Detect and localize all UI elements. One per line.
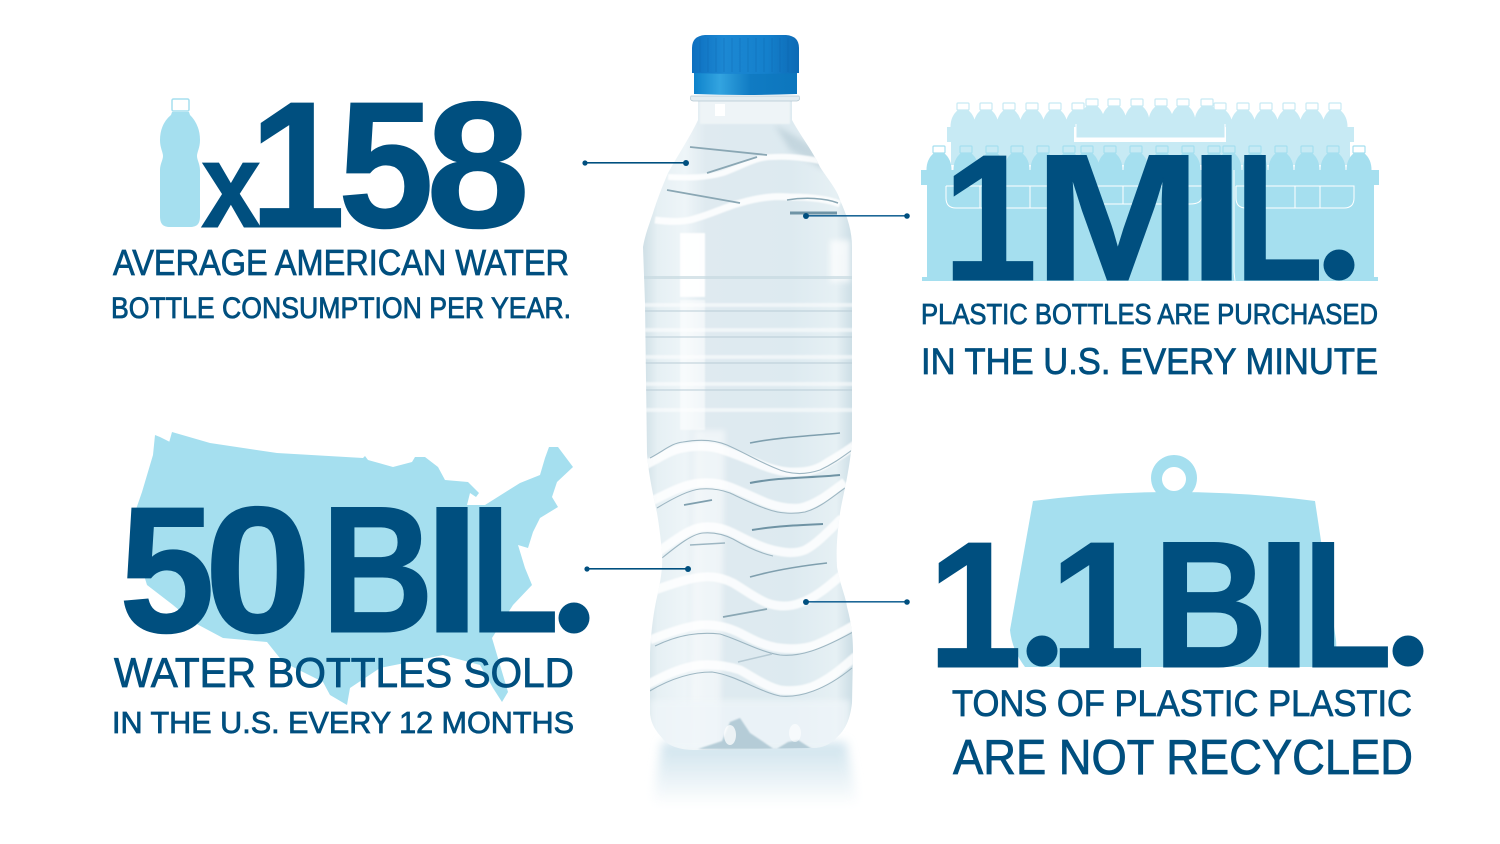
bottle neck ring [690, 96, 800, 101]
big number: 50 BIL.: 0 [204, 470, 312, 671]
big number: x158: x [201, 117, 261, 253]
text: bottle consumption: BOTTLE CONSUMPTION PER YEAR. [111, 292, 571, 325]
bottle cap [692, 35, 799, 95]
big number: 1.1 BIL.: 1 [928, 505, 1022, 706]
big number: 1 MIL.: I [1189, 117, 1245, 319]
big number: 1 MIL.: L [1235, 117, 1323, 319]
connector line: 1 MIL to bottle [803, 213, 910, 219]
icon: single bottle [160, 99, 200, 227]
big number: 1.1 BIL.: . [1031, 592, 1053, 681]
text: not recycled: ARE NOT RECYCLED [953, 731, 1413, 785]
big number: 1.1 BIL.: I [1255, 504, 1313, 706]
bottle reflection [652, 742, 858, 806]
shoulder ribbons [668, 157, 825, 178]
panel: bottles purchased [921, 99, 1379, 382]
big number: 50 BIL.: B [321, 469, 434, 671]
connector line: 158 to bottle [582, 160, 689, 166]
big number: 1 MIL.: M [1034, 117, 1201, 319]
big number: x158: 5 [338, 65, 434, 266]
big number: 1.1 BIL.: . [1397, 592, 1419, 681]
big number: 1.1 BIL.: L [1303, 504, 1392, 706]
horizontal rings [640, 305, 860, 410]
icon: weight [1010, 455, 1336, 667]
big number: 1.1 BIL.: 1 [1049, 505, 1145, 706]
text: every 12 months: IN THE U.S. EVERY 12 MONTHS [112, 705, 574, 740]
icon: bottle photograph [640, 35, 860, 806]
panel: plastic not recycled [928, 455, 1424, 785]
bottle body [643, 96, 853, 750]
big number: 50 BIL.: . [563, 557, 585, 646]
base [698, 718, 812, 750]
big number: 50 BIL.: 5 [119, 470, 215, 671]
big number: 50 BIL.: I [423, 469, 481, 671]
soft shading [777, 128, 821, 169]
icon: crates of bottles [921, 99, 1379, 281]
text: tons of plastic: TONS OF PLASTIC PLASTIC [952, 683, 1412, 724]
waves [645, 445, 856, 691]
big number: x158: 8 [426, 65, 530, 266]
icon: map of the United States [133, 432, 573, 705]
big number: 50 BIL.: L [470, 469, 559, 671]
connector line: 50 BIL to bottle [584, 566, 691, 572]
connector line: 1.1 BIL to bottle [803, 599, 910, 605]
text: every minute: IN THE U.S. EVERY MINUTE [921, 341, 1378, 382]
text: water bottles sold: WATER BOTTLES SOLD [114, 649, 574, 696]
big number: 1 MIL.: . [1328, 205, 1350, 294]
panel: bottles sold [112, 432, 590, 740]
panel: bottle consumption [111, 65, 571, 325]
text: plastic bottles purchased: PLASTIC BOTTLES ARE PURCHASED [921, 299, 1378, 331]
text: average american water: AVERAGE AMERICAN WATER [113, 242, 569, 283]
big number: x158: 1 [249, 65, 345, 266]
big number: 1.1 BIL.: B [1153, 504, 1268, 706]
big number: 1 MIL.: 1 [942, 118, 1038, 319]
